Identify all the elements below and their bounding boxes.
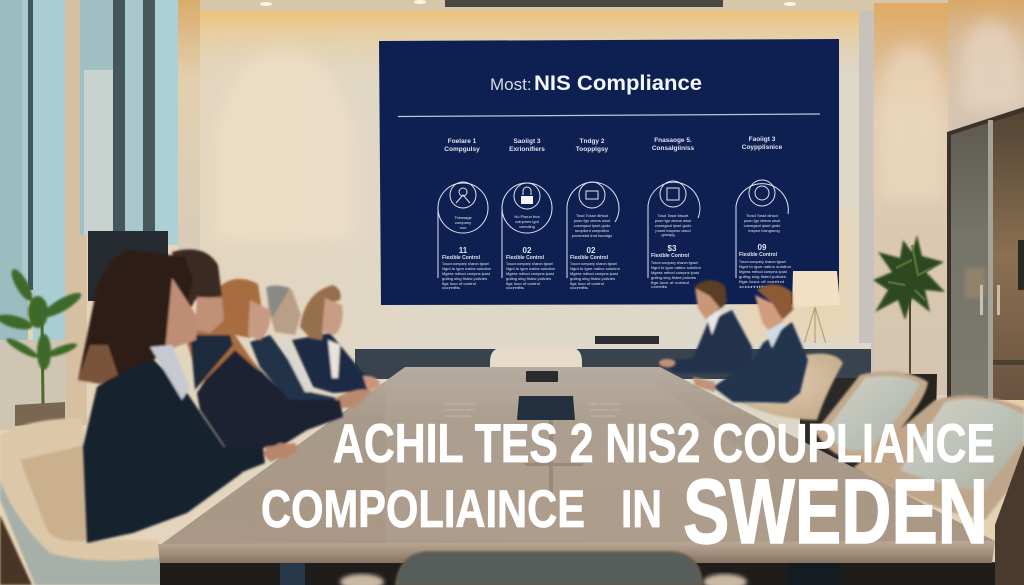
- screen column 2: coinpnes igot: [515, 219, 540, 224]
- left front chair: [0, 418, 235, 585]
- person two: [172, 249, 233, 390]
- person one: [78, 250, 297, 543]
- right floor: [840, 445, 1024, 585]
- reflected text: control policies: [445, 413, 471, 418]
- screen column 4: gosnpg: [661, 232, 675, 237]
- screen column 2: [502, 138, 555, 290]
- screen column 2: csmoling: [519, 224, 535, 229]
- screen column 3: comits: [570, 286, 588, 290]
- reflected text: framework notes: [590, 407, 620, 412]
- under-table area: [160, 563, 995, 585]
- screen column 1: [438, 138, 491, 290]
- person three: [187, 279, 343, 460]
- screen column 5: Faoiigt 3: [749, 136, 776, 143]
- screen column 3: Tosd Tosse dlrtsot: [576, 213, 609, 218]
- screen column 2: Mgess mthod compns ipost: [506, 272, 554, 276]
- screen column 4: posnt tospeso wscd: [655, 228, 691, 233]
- screen column 5: Mgess mthod compns ipost: [739, 270, 787, 274]
- screen column 5: Ngnt to igon natinc solution: [739, 265, 791, 269]
- screen column 5: cosmgsot lpsnt godo: [744, 223, 781, 228]
- screen column 1: Tuson company sharon fgosel: [442, 262, 489, 266]
- screen column 4: cosmgsot lpsnt godo: [655, 223, 692, 228]
- screen column 3: guting sing fisted policies: [570, 277, 615, 281]
- screen column 1: Thessage: [454, 215, 473, 220]
- headline word in: IN: [621, 480, 662, 539]
- screen column 5: guting sing fisted policies: [739, 275, 786, 279]
- wall-mounted dark monitor: [88, 231, 168, 301]
- main wall screen: [379, 39, 839, 305]
- table lamp on credenza: [792, 271, 840, 344]
- screen column 1: Flexible Control: [442, 255, 480, 261]
- chair three: [853, 396, 1024, 520]
- screen column 1: company: [455, 220, 471, 225]
- screen column 3: 02: [587, 246, 596, 255]
- ceiling with lights: [178, 0, 948, 11]
- screen column 2: Exrionifiers: [509, 146, 545, 153]
- screen column 5: posn fgo desns wsot: [744, 218, 781, 223]
- screen column 3: [567, 138, 620, 290]
- screen column 5: flgs loco of control: [739, 280, 784, 284]
- screen column 2: flgs loco of control: [506, 282, 540, 286]
- meeting table: [158, 367, 995, 564]
- screen column 1: flgs loco of control: [442, 282, 476, 286]
- man at the front: [693, 284, 808, 403]
- screen column 4: Mgess mthod compns ipost: [651, 271, 699, 275]
- screen column 4: $3: [668, 244, 677, 253]
- person four: [250, 286, 372, 408]
- reflected text: [445, 401, 621, 418]
- screen column 4: posn fgo desns wsot: [655, 218, 692, 223]
- screen title bold: NIS Compliance: [534, 72, 702, 95]
- screen column 4: guting sing fisted policies: [651, 276, 696, 280]
- chair one: [727, 354, 843, 420]
- screen column 5: comits: [739, 285, 770, 289]
- screen column 1: comits: [442, 286, 460, 290]
- right potted plant: [873, 235, 945, 470]
- screen column 3: Tuson company sharon fgosel: [570, 262, 617, 266]
- screen column 5: Tiosd Tosst dlnsot: [746, 213, 779, 218]
- screen column 2: 02: [523, 246, 532, 255]
- headline overlay: [261, 412, 995, 563]
- screen column 5: 09: [758, 243, 767, 252]
- screen column 2: Saoiigt 3: [513, 138, 541, 145]
- screen column 3: Toopplgsy: [576, 146, 609, 153]
- screen column 1: nuo: [460, 225, 467, 230]
- screen column 4: comits: [651, 285, 667, 289]
- screen column 2: guting sing fisted policies: [506, 277, 551, 281]
- table reflection cross: [525, 420, 583, 495]
- seated people on right: [659, 280, 808, 403]
- screen column 3: Flexible Control: [570, 255, 608, 261]
- screen column 3: poosnsbd tnot tsondgs: [572, 233, 612, 238]
- person five: [292, 285, 381, 393]
- glass door: [947, 107, 1024, 400]
- right wall panels: [859, 0, 1024, 396]
- chair two: [815, 371, 928, 460]
- screen column 3: Mgess mthod compns ipost: [570, 272, 618, 276]
- screen column 4: Consalgiiniss: [652, 145, 695, 152]
- headline line two: COMPOLIAINCE: [261, 480, 585, 539]
- screen column 5: Tuson company sharon fgosel: [739, 260, 786, 264]
- back centre chair: [490, 347, 582, 370]
- screen column 3: Ngnt to igon natinc solution: [570, 267, 620, 271]
- tablet on table: [526, 371, 558, 382]
- screen column 4: Tuson company sharon fgosel: [651, 261, 698, 265]
- windows on left wall: [0, 0, 178, 430]
- screen column 2: comits: [506, 286, 524, 290]
- screen column 1: Compgulsy: [444, 146, 480, 153]
- reflected text: framework notes: [445, 407, 475, 412]
- screen column 5: tospsn tosngsnog: [748, 228, 780, 233]
- reflected text: control policies: [590, 413, 616, 418]
- front chair back: [396, 552, 702, 585]
- screen title: Most:: [490, 75, 532, 94]
- screen column 1: Ngnt to igon natinc solution: [442, 267, 491, 271]
- screen column 3: cosmgsot lpsnt godo: [574, 223, 611, 228]
- screen column 5: Flexible Control: [739, 252, 777, 258]
- screen column 1: guting sing fisted policies: [442, 277, 487, 281]
- left wall panel: [178, 0, 200, 260]
- left potted plant: [0, 266, 84, 426]
- screen column 1: Mgess mthod compns ipost: [442, 272, 490, 276]
- screen column 3: snoplicnt csnpotion: [575, 228, 609, 233]
- seated people on left: [78, 249, 381, 543]
- screen column 3: flgs loco of control: [570, 282, 604, 286]
- screen column 2: Flexible Control: [506, 255, 544, 261]
- screen column 4: flgs loco of control: [651, 281, 689, 285]
- screen column 2: Tuson company sharon fgosel: [506, 262, 553, 266]
- folder on table: [517, 396, 575, 420]
- right side chairs: [727, 354, 1024, 520]
- screen column 5: Coypplisnice: [742, 144, 783, 151]
- screen column 3: posn fgo desns wsot: [574, 218, 611, 223]
- screen column 1: Foelare 1: [448, 138, 477, 145]
- screen column 4: Flexible Control: [651, 253, 689, 259]
- man at the back: [659, 280, 752, 373]
- screen column 3: Tndgy 2: [580, 138, 605, 145]
- screen column 4: Ngnt to igon natinc solution: [651, 266, 701, 270]
- screen column 4: [648, 137, 701, 289]
- screen divider: [398, 114, 820, 116]
- screen column 4: Fnasaoge 5.: [654, 137, 692, 144]
- screen column 2: Nu Pisrun fnot: [514, 214, 541, 219]
- credenza: [355, 336, 906, 473]
- screen column 4: Tosd Tosst fdsoet: [658, 213, 689, 218]
- screen column 1: 11: [459, 246, 468, 255]
- screen column 2: Ngnt to igon natinc solution: [506, 267, 555, 271]
- reflected text: NIS2 compliance: [445, 401, 476, 406]
- screen column 5: [736, 136, 791, 289]
- reflected text: NIS2 compliance: [590, 401, 621, 406]
